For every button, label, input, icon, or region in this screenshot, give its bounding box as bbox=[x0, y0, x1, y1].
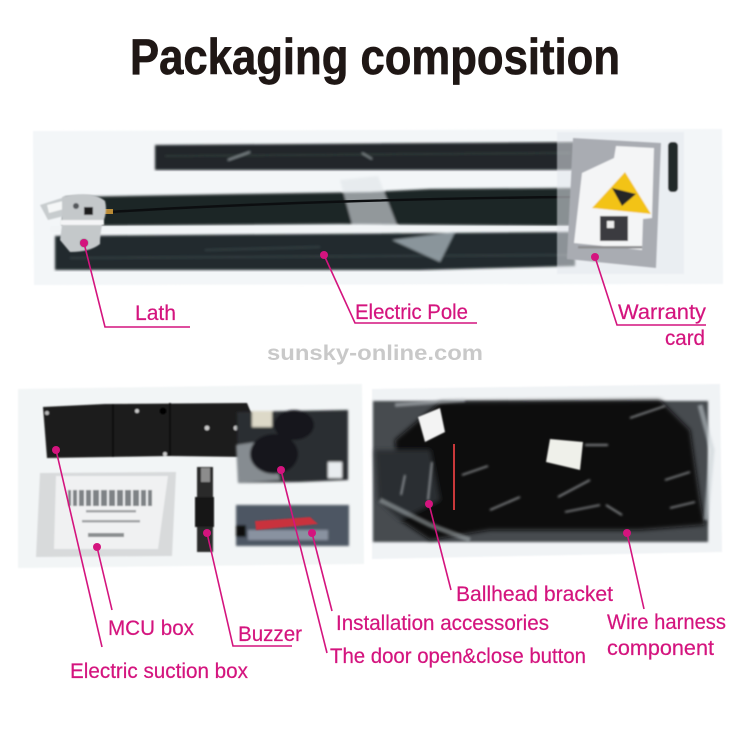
title: Packaging composition bbox=[130, 29, 620, 85]
callout: Electric suction box: Electric suction box bbox=[70, 660, 248, 683]
lath bracket bbox=[40, 194, 106, 252]
callout: The door open&close button bbox=[277, 466, 586, 668]
callout: Warranty card bbox=[591, 253, 707, 350]
white connectors bbox=[418, 408, 583, 470]
callout: Lath bbox=[80, 239, 190, 327]
callout: Buzzer: Buzzer bbox=[238, 623, 302, 646]
panel: top foam tray photo bbox=[33, 129, 723, 285]
callout: Warranty card: card bbox=[665, 327, 705, 350]
callout: Wire harness component: Wire harness bbox=[607, 611, 726, 634]
callout: MCU box bbox=[93, 543, 194, 640]
lower electric pole bbox=[55, 232, 575, 270]
callout: Warranty card: Warranty bbox=[618, 301, 707, 324]
callout: Electric suction box bbox=[52, 446, 248, 683]
control cable bbox=[110, 197, 575, 212]
foam ridge between poles bbox=[50, 226, 575, 232]
callout: Ballhead bracket bbox=[425, 500, 613, 606]
watermark: sunsky-online.com bbox=[267, 342, 483, 365]
red tool bbox=[255, 517, 318, 530]
buzzer bbox=[195, 467, 214, 552]
installation accessories bbox=[236, 505, 349, 546]
panel: bottom-left foam tray photo bbox=[18, 384, 364, 568]
callout: Electric Pole bbox=[320, 251, 477, 324]
callout: Wire harness component bbox=[607, 529, 726, 660]
callout: Electric Pole: Electric Pole bbox=[355, 301, 468, 324]
door button bag bbox=[236, 410, 348, 483]
callout: Installation accessories: Installation accessories bbox=[336, 612, 549, 635]
callout: MCU box: MCU box bbox=[108, 617, 194, 640]
plastic wrap highlights bbox=[380, 400, 712, 540]
MCU box bbox=[36, 472, 176, 557]
upper electric pole bbox=[155, 142, 575, 170]
callout: Wire harness component: component bbox=[607, 637, 714, 660]
brass cable fitting bbox=[104, 209, 113, 214]
callout: Lath: Lath bbox=[135, 302, 176, 325]
wire harness bundle bbox=[375, 400, 705, 540]
middle electric pole bbox=[62, 176, 575, 238]
red wire bbox=[453, 444, 455, 510]
warranty card in plastic sleeve bbox=[557, 132, 684, 274]
callout: The door open&close button: The door open&close button bbox=[330, 645, 586, 668]
callout: Installation accessories bbox=[308, 529, 549, 635]
callout: Ballhead bracket: Ballhead bracket bbox=[456, 583, 613, 606]
electric suction box bbox=[43, 403, 252, 458]
callout: Buzzer bbox=[203, 529, 302, 646]
panel: bottom-right foam tray photo bbox=[372, 384, 722, 559]
